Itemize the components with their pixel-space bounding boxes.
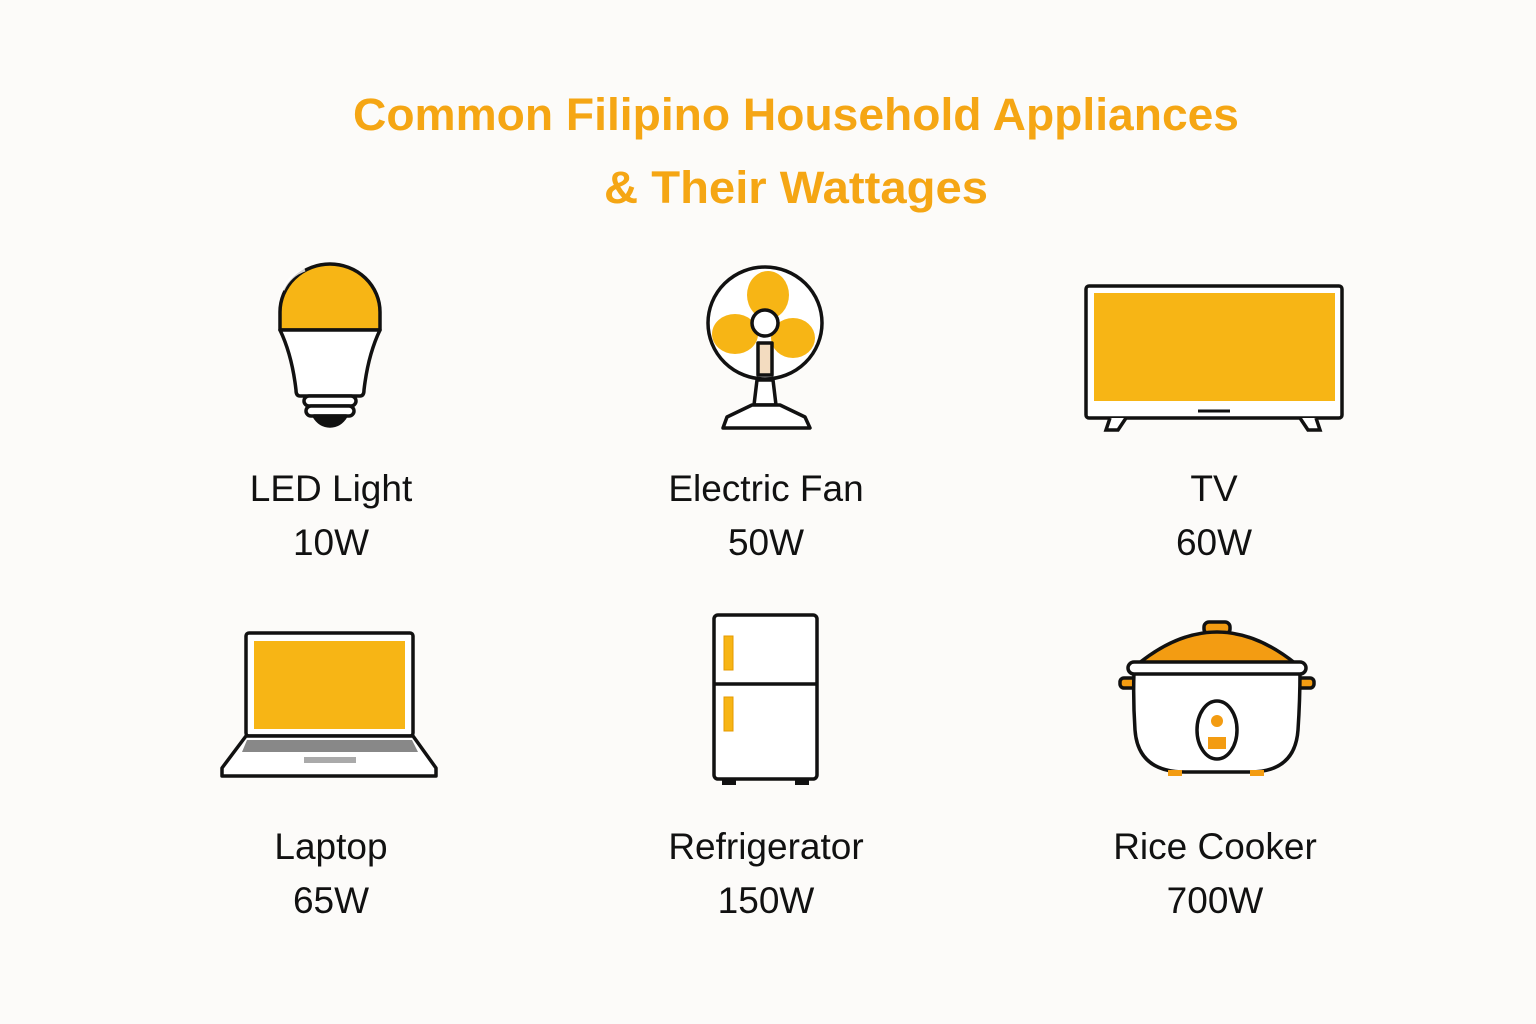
label: Rice Cooker: Rice Cooker	[1113, 826, 1317, 867]
label: Laptop: Laptop	[274, 826, 388, 867]
label: LED Light	[250, 468, 413, 563]
icon: LED light bulb	[280, 264, 380, 426]
label: LED Light: 10W	[293, 522, 369, 563]
label: Electric Fan: Electric Fan	[668, 468, 864, 509]
label: Refrigerator: Refrigerator	[668, 826, 864, 867]
label: Rice Cooker: 700W	[1167, 880, 1263, 921]
label: Refrigerator: 150W	[718, 880, 814, 921]
icon: refrigerator	[714, 615, 817, 785]
label: TV: 60W	[1176, 522, 1252, 563]
label: LED Light: LED Light	[250, 468, 413, 509]
label: Laptop	[274, 826, 388, 921]
label: Electric Fan: 50W	[728, 522, 804, 563]
label: TV	[1176, 468, 1252, 563]
label: Refrigerator	[668, 826, 864, 921]
label: Laptop: 65W	[293, 880, 369, 921]
icon: laptop	[222, 633, 436, 776]
icon: rice cooker	[1120, 622, 1314, 776]
icon: electric fan	[708, 267, 822, 428]
label: Electric Fan	[668, 468, 864, 563]
title: & Their Wattages	[604, 162, 988, 213]
icon: TV	[1086, 286, 1342, 430]
title	[353, 89, 1239, 213]
label: TV: TV	[1190, 468, 1238, 509]
label: Rice Cooker	[1113, 826, 1317, 921]
title: Common Filipino Household Appliances	[353, 89, 1239, 140]
